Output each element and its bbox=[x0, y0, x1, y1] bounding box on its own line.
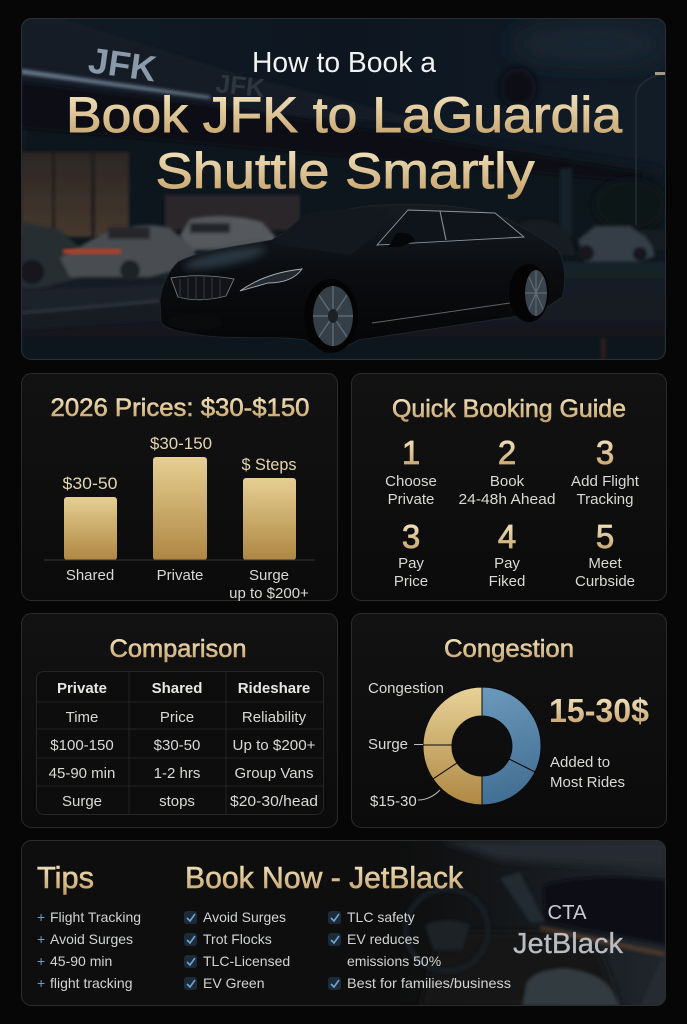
comparison table: $30-50 bbox=[154, 737, 200, 754]
step 3 second row: Price bbox=[394, 573, 428, 590]
front wheel bbox=[304, 279, 358, 353]
JFK sign: JFK bbox=[86, 39, 159, 89]
checklist column 2: emissions 50% bbox=[347, 953, 441, 969]
stat caption: Most Rides bbox=[550, 774, 625, 791]
step 3: Tracking bbox=[577, 491, 633, 508]
checklist column 1: Trot Flocks bbox=[203, 931, 272, 947]
heading: comparison: Comparison bbox=[110, 635, 246, 663]
donut chart bbox=[423, 687, 541, 805]
checklist column 1: Avoid Surges bbox=[203, 909, 286, 925]
step 5 bbox=[575, 518, 635, 590]
panel: hero banner bbox=[20, 18, 670, 360]
bar chart: price ranges: $30-150 bbox=[150, 434, 212, 453]
hero title line 2: Shuttle Smartly bbox=[156, 143, 534, 199]
tips list: Flight Tracking bbox=[50, 909, 141, 925]
step 4 bbox=[489, 518, 525, 590]
background cars bbox=[20, 216, 666, 288]
checklist column 1 bbox=[184, 909, 290, 991]
big stat: 15-30$ bbox=[549, 692, 649, 729]
step 3 second row: 3 bbox=[402, 518, 420, 555]
tips list: flight tracking bbox=[50, 975, 132, 991]
heading: tips: Tips bbox=[37, 860, 94, 895]
comparison table: 45-90 min bbox=[49, 765, 115, 782]
tips list: + bbox=[37, 909, 45, 925]
step 5: Curbside bbox=[575, 573, 635, 590]
step 1: 1 bbox=[402, 434, 420, 471]
step 3 second row bbox=[394, 518, 428, 590]
step 1: Private bbox=[388, 491, 434, 508]
bar chart: price ranges: Shared bbox=[66, 567, 114, 584]
step 5: Meet bbox=[588, 555, 622, 572]
comparison table: Price bbox=[160, 709, 194, 726]
CTA label: CTA bbox=[548, 902, 587, 924]
step 1 bbox=[385, 434, 437, 508]
step 3: 3 bbox=[596, 434, 614, 471]
checklist column 2 bbox=[328, 909, 511, 991]
heading: congestion: Congestion bbox=[444, 635, 574, 663]
comparison table: $100-150 bbox=[50, 737, 114, 754]
tips list: 45-90 min bbox=[50, 953, 112, 969]
step 3: Add Flight bbox=[571, 473, 640, 490]
comparison table: Private bbox=[57, 680, 107, 697]
hero kicker: How to Book a bbox=[252, 47, 437, 79]
panel: 2026 prices bbox=[22, 374, 338, 602]
comparison table: Reliability bbox=[242, 709, 307, 726]
step 4: Fiked bbox=[489, 573, 525, 590]
step 4: Pay bbox=[494, 555, 520, 572]
panel: comparison bbox=[22, 614, 338, 828]
donut label: surge: Surge bbox=[368, 736, 408, 753]
rear wheel bbox=[509, 264, 549, 322]
donut label: $15-30: $15-30 bbox=[370, 793, 417, 810]
heading: book now: Book Now - JetBlack bbox=[185, 860, 463, 895]
comparison table: Rideshare bbox=[238, 680, 310, 697]
car interior image bbox=[390, 840, 666, 1006]
donut label: $15-30 bbox=[370, 790, 440, 810]
JetBlack brand: JetBlack bbox=[513, 928, 623, 960]
hero title line 1: Book JFK to LaGuardia bbox=[66, 87, 622, 143]
bar chart: price ranges: Surge bbox=[249, 567, 289, 584]
step 2: 24-48h Ahead bbox=[458, 491, 556, 508]
panel: congestion bbox=[352, 614, 666, 828]
panel: tips and book now bbox=[21, 840, 666, 1006]
bar chart: price ranges bbox=[44, 434, 315, 602]
tips list: + bbox=[37, 931, 45, 947]
stat caption: Added to bbox=[550, 754, 610, 771]
tips list bbox=[37, 909, 141, 991]
comparison table: Up to $200+ bbox=[232, 737, 316, 754]
black car bbox=[160, 204, 565, 353]
comparison table: Shared bbox=[152, 680, 202, 697]
panel: quick booking guide bbox=[352, 374, 666, 600]
hero photo: night terminal and black car bbox=[20, 18, 670, 360]
stat caption bbox=[550, 754, 625, 791]
tips list: + bbox=[37, 975, 45, 991]
checklist column 1: TLC-Licensed bbox=[203, 953, 290, 969]
headlight bbox=[240, 269, 302, 291]
comparison table: stops bbox=[159, 793, 195, 810]
bar chart: price ranges: up to $200+ bbox=[229, 585, 309, 602]
comparison table: $20-30/head bbox=[230, 793, 318, 810]
bar chart: price ranges: $30-50 bbox=[62, 474, 118, 493]
step 2: Book bbox=[490, 473, 525, 490]
heading: guide: Quick Booking Guide bbox=[392, 395, 626, 423]
checklist column 2: TLC safety bbox=[347, 909, 415, 925]
comparison table: Time bbox=[66, 709, 98, 726]
tips list: + bbox=[37, 953, 45, 969]
heading: prices: 2026 Prices: $30-$150 bbox=[50, 394, 310, 422]
checklist column 1: EV Green bbox=[203, 975, 264, 991]
step 4: 4 bbox=[498, 518, 516, 555]
JFK sign reflection: JFK bbox=[214, 68, 267, 103]
step 2 bbox=[458, 434, 556, 508]
step 5: 5 bbox=[596, 518, 614, 555]
comparison table: Group Vans bbox=[235, 765, 313, 782]
street lamp bbox=[636, 74, 664, 225]
tips list: Avoid Surges bbox=[50, 931, 133, 947]
comparison table bbox=[36, 672, 324, 814]
comparison table: 1-2 hrs bbox=[154, 765, 200, 782]
comparison table: Surge bbox=[62, 793, 102, 810]
grille bbox=[171, 276, 234, 300]
bar chart: price ranges: Private bbox=[157, 567, 203, 584]
step 1: Choose bbox=[385, 473, 437, 490]
step 2: 2 bbox=[498, 434, 516, 471]
donut label: congestion: Congestion bbox=[368, 680, 444, 697]
step 3 bbox=[571, 434, 640, 508]
bar chart: price ranges: $ Steps bbox=[242, 455, 296, 474]
step 3 second row: Pay bbox=[398, 555, 424, 572]
checklist column 2: EV reduces bbox=[347, 931, 419, 947]
checklist column 2: Best for families/business bbox=[347, 975, 511, 991]
